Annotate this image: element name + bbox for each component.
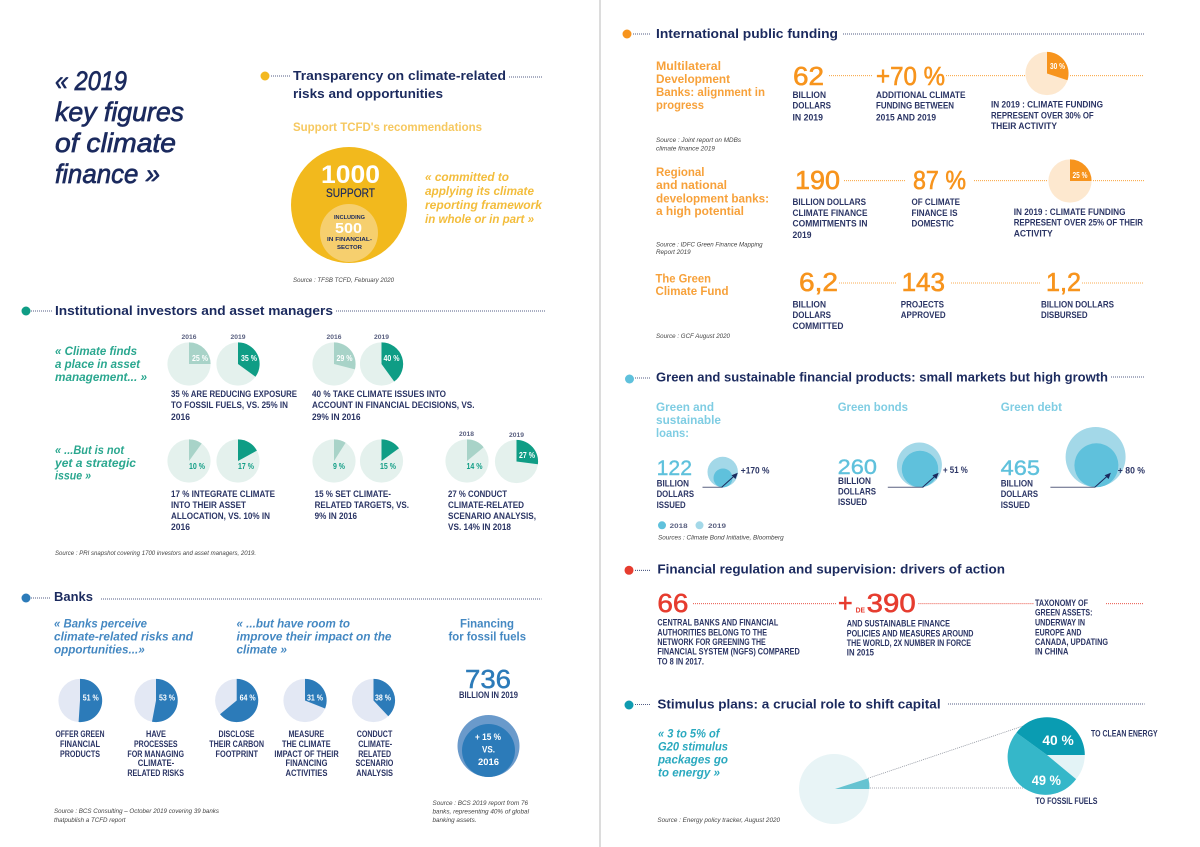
pie: 29% 2016: 2016: [326, 334, 342, 341]
quote: committed: reporting framework: [425, 198, 543, 212]
stat: 87%: [912, 167, 966, 230]
stat: more than 390 policies: +: [838, 588, 853, 618]
stat: 62 billion: 62: [793, 63, 824, 91]
stat: 1,2: 1,2: [1046, 269, 1081, 297]
stat: more than 390 policies: AND SUSTAINABLE FINANCE: [847, 619, 950, 630]
stat: 6,2: DOLLARS: [792, 310, 831, 321]
stat: 66 central banks: [657, 588, 800, 668]
source: Source : PRI snapshot covering 1700 investors and asset managers, 2019.: [55, 551, 256, 557]
item: green bonds: BILLION: [838, 476, 871, 487]
item: green bonds: DOLLARS: [838, 487, 876, 498]
heading: financial regulation: Financial regulation and supervision: drivers of action: [657, 562, 1005, 577]
pie: 35% 2019: 2019: [230, 334, 246, 341]
legend: 2018: [670, 523, 688, 530]
caption: financial decisions: 29% IN 2016: [312, 412, 360, 423]
heading: institutional investors: Institutional investors and asset managers: [55, 303, 333, 318]
pie: 17%: [216, 439, 260, 483]
label: to fossil fuels: TO FOSSIL FUELS: [1036, 796, 1098, 807]
quote: 3 to 5%: « 3 to 5% of: [658, 727, 720, 741]
text: taxonomy of green assets: IN CHINA: [1035, 647, 1068, 658]
pie: processes 53%: RELATED RISKS: [127, 768, 184, 779]
caption: 30% of activity: [991, 100, 1103, 132]
item: green debt: DOLLARS: [1001, 489, 1038, 500]
panel: transparency on climate-related risks: [260, 68, 543, 284]
pie: energy breakdown: 49 %: [1032, 772, 1061, 788]
stat: 190: 190: [795, 167, 840, 195]
row heading: Regional: [656, 165, 704, 179]
pie: 10%: 10 %: [189, 461, 205, 471]
panel: institutional investors: [22, 303, 545, 557]
pie: 35% 2019: [216, 334, 260, 386]
item: green and sustainable loans: DOLLARS: [657, 489, 694, 500]
pie: 27% 2019: 2019: [509, 432, 524, 439]
pie: 29% 2016: 29 %: [336, 353, 353, 363]
stat: +70%: [876, 63, 966, 124]
callout: financing for fossil fuels: [448, 616, 526, 777]
pie: 25%: 25 %: [1072, 170, 1088, 180]
heading: green products: Green and sustainable financial products: small markets but high growth: [656, 370, 1108, 385]
source: Source : IDFC Green Finance Mapping: [656, 243, 763, 249]
text: taxonomy of green assets: GREEN ASSETS:: [1035, 608, 1092, 619]
stat: 1,2: BILLION DOLLARS: [1041, 300, 1114, 311]
item: green bonds: [838, 400, 968, 508]
chart: nested circles 1000 supporters: 1000: [321, 161, 380, 189]
chart: nested circles 1000 supporters: SECTOR: [337, 245, 362, 251]
row heading: [656, 165, 769, 218]
caption: scenario analysis: CLIMATE-RELATED: [448, 500, 524, 511]
callout: financing for fossil fuels: VS.: [482, 745, 495, 756]
chart: nested circles 1000 supporters: [291, 147, 407, 263]
pie: scenario analysis 38%: 38 %: [375, 693, 391, 703]
item: green and sustainable loans: sustainable: [656, 413, 721, 427]
row heading: [656, 59, 765, 112]
quote: room to improve: « ...but have room to: [236, 616, 350, 630]
source: BCS Consulting: Source : BCS Consulting – October 2019 covering 39 banks: [54, 809, 219, 815]
stat: 62 billion: [792, 63, 831, 124]
caption: fossil exposure: TO FOSSIL FUELS, VS. 25% IN: [171, 400, 288, 411]
stat: 143: PROJECTS: [901, 300, 944, 311]
caption: financial decisions: [312, 389, 474, 423]
row heading: Climate Fund: [656, 284, 728, 298]
item: green debt: Green debt: [1001, 400, 1062, 414]
pie: scenario analysis 38%: SCENARIO: [356, 758, 393, 769]
quote: 3 to 5%: G20 stimulus: [658, 740, 728, 754]
stat: more than 390 policies: DE: [856, 608, 865, 615]
caption: scenario analysis: VS. 14% IN 2018: [448, 522, 511, 533]
pie: measure impact 31%: [274, 679, 339, 779]
stat: more than 390 policies: IN 2015: [847, 648, 875, 659]
stat: 1,2: [1041, 269, 1114, 321]
pie: measure impact 31%: ACTIVITIES: [286, 768, 328, 779]
caption: fossil exposure: 2016: [171, 412, 190, 423]
row heading: Development: [656, 72, 730, 86]
pie: offer green products 51%: OFFER GREEN: [56, 729, 105, 740]
pie: carbon footprint 64%: DISCLOSE: [218, 729, 254, 740]
item: green and sustainable loans: [656, 400, 770, 511]
pie: scenario analysis 38%: CONDUCT: [357, 729, 392, 740]
pie: 25% 2016: 25 %: [192, 353, 208, 363]
stat: 190: COMMITMENTS IN: [792, 219, 868, 230]
pie: 27% 2019: [495, 432, 538, 483]
source: climate finance 2019: [656, 147, 716, 153]
row: the green climate fund: [656, 269, 1144, 340]
stat: 66 central banks: TO 8 IN 2017.: [657, 657, 704, 668]
pie: measure impact 31%: 31 %: [307, 693, 323, 703]
heading: transparency: [260, 68, 543, 101]
quote: 3 to 5%: [657, 727, 728, 780]
stat: 62 billion: DOLLARS: [792, 101, 831, 112]
quote: room to improve: improve their impact on the: [236, 630, 392, 644]
text: taxonomy of green assets: CANADA, UPDATING: [1035, 637, 1108, 648]
caption: asset allocation: INTO THEIR ASSET: [171, 500, 246, 511]
pie: processes 53%: FOR MANAGING: [127, 749, 184, 760]
source: Source : TFSB TCFD, February 2020: [293, 278, 395, 284]
pie: measure impact 31%: MEASURE: [288, 729, 324, 740]
pie: share of stimulus to energy: [799, 754, 870, 824]
chart: bubble growth +80%: + 80 %: [1118, 465, 1146, 476]
caption: asset allocation: 17 % INTEGRATE CLIMATE: [171, 489, 275, 500]
caption: scenario analysis: [448, 489, 536, 533]
stat: 87%: 87 %: [913, 167, 966, 195]
quote: climate finds a place: [55, 344, 147, 384]
pie: processes 53%: 53 %: [159, 693, 175, 703]
stat: 190: [792, 167, 868, 241]
pie: 40% 2019: [360, 334, 403, 386]
stat: 87%: OF CLIMATE: [912, 197, 960, 208]
pie: energy breakdown: [1008, 717, 1085, 795]
stat: 143: [901, 269, 946, 321]
stat: 66 central banks: CENTRAL BANKS AND FINANCIAL: [657, 618, 778, 629]
pie: 40% 2019: 2019: [374, 334, 389, 341]
chart: nested circles 1000 supporters: 500: [335, 220, 362, 237]
row heading: a high potential: [656, 204, 744, 218]
pie: processes 53%: [127, 679, 184, 779]
quote: room to improve: climate »: [236, 642, 287, 656]
item: green and sustainable loans: 122: [657, 456, 692, 480]
stat: +70%: ADDITIONAL CLIMATE: [876, 90, 966, 101]
pie: 40% 2019: 40 %: [384, 353, 400, 363]
quote: climate finds a place: « Climate finds: [55, 344, 137, 358]
pie: 25% 2016: [167, 334, 211, 386]
panel: green and sustainable financial products: [625, 370, 1146, 542]
quote: 3 to 5%: packages go: [657, 752, 728, 766]
heading: institutional investors: [22, 303, 545, 318]
pie: offer green products 51%: 51 %: [83, 693, 99, 703]
quote: banks perceive: opportunities...»: [54, 642, 145, 656]
title: key figures: [55, 97, 184, 127]
source: Source : Joint report on MDBs: [656, 138, 741, 144]
pie: measure impact 31%: THE CLIMATE: [282, 739, 331, 750]
pie: energy breakdown: 40 %: [1042, 732, 1074, 748]
heading: transparency: Transparency on climate-related: [293, 68, 506, 83]
quote: banks perceive: [54, 616, 194, 656]
quote: not yet strategic: yet a strategic: [54, 456, 136, 470]
stat: more than 390 policies: 390: [867, 588, 916, 618]
chart: nested circles 1000 supporters: INCLUDING: [334, 215, 365, 221]
quote: climate finds a place: a place in asset: [55, 357, 141, 371]
title: of climate: [55, 128, 176, 158]
caption: 25% of activity: [1014, 207, 1143, 240]
source: Report 2019: [656, 250, 691, 256]
quote: climate finds a place: management... »: [55, 370, 147, 384]
pie: offer green products 51%: PRODUCTS: [60, 749, 100, 760]
source: BCS Consulting: [54, 809, 219, 824]
source: BCS report: Source : BCS 2019 report from 76: [432, 801, 529, 807]
caption: targets: 9% IN 2016: [315, 511, 357, 522]
heading: stimulus plans: [624, 696, 1145, 711]
panel: international public funding: [622, 26, 1144, 340]
title: [55, 66, 184, 189]
pie: carbon footprint 64%: FOOTPRINT: [216, 749, 258, 760]
source: Source : Energy policy tracker, August 2020: [657, 818, 781, 824]
caption: fossil exposure: 35 % ARE REDUCING EXPOSURE: [171, 389, 297, 400]
stat: 66 central banks: FINANCIAL SYSTEM (NGFS) COMPARED: [657, 647, 800, 658]
text: taxonomy of green assets: [1035, 598, 1108, 658]
pie: 17%: 17 %: [238, 461, 254, 471]
caption: scenario analysis: SCENARIO ANALYSIS,: [448, 511, 536, 522]
stat: more than 390 policies: THE WORLD, 2X NUMBER IN FORCE: [847, 638, 971, 649]
source: BCS report: banks, representing 40% of global: [432, 810, 530, 816]
caption: financial decisions: 40 % TAKE CLIMATE ISSUES INTO: [312, 389, 446, 400]
stat: 1,2: DISBURSED: [1041, 310, 1088, 321]
stat: more than 390 policies: POLICIES AND MEASURES AROUND: [847, 628, 974, 639]
item: green debt: 465: [1001, 456, 1040, 480]
text: taxonomy of green assets: TAXONOMY OF: [1035, 598, 1088, 609]
item: green and sustainable loans: BILLION: [657, 479, 689, 490]
heading: international public funding: International public funding: [656, 26, 838, 41]
pie: 25% 2016: 2016: [182, 334, 197, 341]
callout: financing for fossil fuels: Financing: [460, 616, 514, 630]
pie: 25%: [1048, 159, 1092, 203]
caption: targets: 15 % SET CLIMATE-: [315, 489, 391, 500]
row heading: Multilateral: [656, 59, 721, 73]
stat: 190: BILLION DOLLARS: [792, 197, 866, 208]
caption: scenario analysis: 27 % CONDUCT: [448, 489, 507, 500]
quote: committed: [425, 170, 543, 226]
quote: committed: applying its climate: [425, 184, 534, 198]
pie: 14% 2018: 2018: [459, 431, 474, 438]
pie: scenario analysis 38%: RELATED: [358, 749, 391, 760]
pie: 10%: [167, 439, 211, 483]
chart: nested circles 1000 supporters: IN FINANCIAL-: [327, 237, 372, 243]
item: green and sustainable loans: loans:: [656, 426, 689, 440]
quote: not yet strategic: issue »: [55, 468, 91, 482]
item: green bonds: 260: [838, 455, 877, 479]
legend: 2019: [708, 523, 726, 530]
stat: 6,2: 6,2: [799, 269, 838, 297]
stat: +70%: FUNDING BETWEEN: [876, 101, 954, 112]
stat: 62 billion: IN 2019: [792, 113, 823, 124]
caption: asset allocation: ALLOCATION, VS. 10% IN: [171, 511, 270, 522]
stat: more than 390 policies: [838, 588, 974, 659]
caption: targets: RELATED TARGETS, VS.: [315, 500, 409, 511]
quote: not yet strategic: [54, 443, 136, 482]
caption: 25% of activity: ACTIVITY: [1014, 229, 1053, 240]
pie: offer green products 51%: [56, 679, 105, 760]
heading: transparency: risks and opportunities: [293, 86, 443, 101]
panel: banks: [22, 589, 542, 824]
caption: 25% of activity: IN 2019 : CLIMATE FUNDING: [1014, 207, 1126, 218]
quote: committed: in whole or in part »: [425, 212, 534, 226]
chart: bubble growth +51%: + 51 %: [943, 465, 968, 476]
item: green bonds: Green bonds: [838, 400, 908, 414]
pie: 15%: 15 %: [380, 461, 396, 471]
pie: carbon footprint 64%: THEIR CARBON: [209, 739, 264, 750]
pie: carbon footprint 64%: 64 %: [240, 693, 256, 703]
pie: 15%: [360, 439, 403, 483]
pie: scenario analysis 38%: ANALYSIS: [356, 768, 393, 779]
item: green bonds: ISSUED: [838, 497, 867, 508]
title: « 2019: [55, 66, 127, 96]
row heading: The Green: [656, 272, 711, 286]
pie: processes 53%: CLIMATE-: [138, 758, 174, 769]
caption: asset allocation: [171, 489, 275, 533]
caption: fossil exposure: [171, 389, 297, 423]
pie: processes 53%: HAVE: [146, 729, 166, 740]
quote: committed: « committed to: [425, 170, 509, 184]
source: BCS Consulting: thatpublish a TCFD report: [54, 818, 126, 824]
stat: 6,2: COMMITTED: [792, 321, 844, 332]
pie: carbon footprint 64%: [209, 679, 264, 760]
chart: bubble growth +80%: [1050, 427, 1146, 487]
source: BCS report: banking assets.: [432, 818, 476, 824]
stat: 66 central banks: NETWORK FOR GREENING THE: [657, 637, 766, 648]
stat: 6,2: [792, 269, 844, 332]
panel: financial regulation and supervision: [624, 562, 1144, 668]
item: green debt: ISSUED: [1001, 500, 1030, 511]
pie: processes 53%: PROCESSES: [134, 739, 178, 750]
stat: 190: CLIMATE FINANCE: [792, 208, 868, 219]
caption: 30% of activity: THEIR ACTIVITY: [991, 121, 1058, 132]
callout: financing for fossil fuels: BILLION IN 2019: [459, 690, 518, 701]
stat: 190: 2019: [792, 230, 812, 241]
row: regional and national development banks: [656, 159, 1144, 256]
item: green debt: BILLION: [1001, 479, 1033, 490]
text: taxonomy of green assets: EUROPE AND: [1035, 627, 1081, 638]
source: BCS report: [432, 801, 530, 824]
stat: +70%: +70 %: [876, 63, 945, 91]
pie: 35% 2019: 35 %: [241, 353, 257, 363]
heading: stimulus plans: Stimulus plans: a crucial role to shift capital: [657, 696, 941, 711]
callout: financing for fossil fuels: 2016: [478, 757, 499, 768]
source: [656, 138, 741, 153]
heading: international public funding: [622, 26, 1144, 41]
stat: 143: 143: [902, 269, 945, 297]
quote: room to improve: [236, 616, 392, 656]
caption: financial decisions: ACCOUNT IN FINANCIAL DECISIONS, VS.: [312, 400, 474, 411]
callout: financing for fossil fuels: 736: [465, 664, 511, 694]
legend: [658, 521, 726, 530]
pie: 9%: 9 %: [333, 461, 345, 471]
stat: 87%: FINANCE IS: [912, 208, 958, 219]
source: Source : GCF August 2020: [656, 334, 731, 340]
stat: 62 billion: BILLION: [792, 90, 826, 101]
pie: 30%: [1025, 52, 1069, 95]
pie: 27% 2019: 27 %: [519, 450, 535, 460]
caption: 30% of activity: IN 2019 : CLIMATE FUNDING: [991, 100, 1103, 111]
item: green and sustainable loans: ISSUED: [657, 500, 686, 511]
row heading: Banks: alignment in: [656, 85, 765, 99]
pie: measure impact 31%: IMPACT OF THEIR: [274, 749, 339, 760]
item: green debt: [1001, 400, 1146, 511]
subheading: support TCFD: Support TCFD's recommendations: [293, 122, 482, 134]
pie: scenario analysis 38%: [352, 679, 395, 779]
pie: 14% 2018: [445, 431, 489, 483]
caption: 30% of activity: REPRESENT OVER 30% OF: [991, 111, 1094, 122]
stat: +70%: 2015 AND 2019: [876, 113, 936, 124]
row heading: development banks:: [656, 192, 769, 206]
quote: banks perceive: « Banks perceive: [54, 616, 147, 630]
quote: 3 to 5%: to energy »: [658, 766, 720, 780]
text: taxonomy of green assets: UNDERWAY IN: [1035, 618, 1085, 629]
callout: financing for fossil fuels: for fossil fuels: [448, 630, 526, 644]
stat: 143: APPROVED: [901, 310, 946, 321]
quote: banks perceive: climate-related risks and: [54, 630, 194, 644]
heading: banks: [22, 589, 542, 604]
panel: stimulus plans: [624, 696, 1158, 824]
chart: bubble growth +170%: +170 %: [741, 465, 770, 476]
row: multilateral development banks: [656, 52, 1144, 153]
caption: 25% of activity: REPRESENT OVER 25% OF THEIR: [1014, 218, 1143, 229]
pie: 29% 2016: [312, 334, 356, 386]
pie: measure impact 31%: FINANCING: [286, 758, 328, 769]
heading: banks: Banks: [54, 589, 93, 604]
pie: 14% 2018: 14 %: [466, 461, 483, 471]
stat: 66 central banks: 66: [657, 588, 688, 618]
source: Sources : Climate Bond Initiative, Bloomberg: [658, 536, 784, 542]
row heading: [656, 272, 728, 298]
caption: targets: [315, 489, 409, 522]
stat: 6,2: BILLION: [792, 300, 826, 311]
quote: not yet strategic: « ...But is not: [55, 443, 125, 457]
chart: nested circles 1000 supporters: SUPPORT: [326, 186, 376, 200]
pie: scenario analysis 38%: CLIMATE-: [358, 739, 392, 750]
label: to clean energy: TO CLEAN ENERGY: [1091, 729, 1158, 740]
source: [656, 243, 763, 256]
stat: 87%: DOMESTIC: [912, 219, 954, 230]
row heading: progress: [656, 98, 704, 112]
pie: 9%: [312, 439, 356, 483]
caption: asset allocation: 2016: [171, 522, 190, 533]
pie: offer green products 51%: FINANCIAL: [60, 739, 100, 750]
pie: 30%: 30 %: [1050, 61, 1065, 71]
title: finance »: [55, 159, 160, 189]
callout: financing for fossil fuels: + 15 %: [475, 732, 501, 743]
row heading: and national: [656, 178, 727, 192]
stat: 66 central banks: AUTHORITIES BELONG TO THE: [657, 627, 767, 638]
item: green and sustainable loans: Green and: [656, 400, 714, 414]
